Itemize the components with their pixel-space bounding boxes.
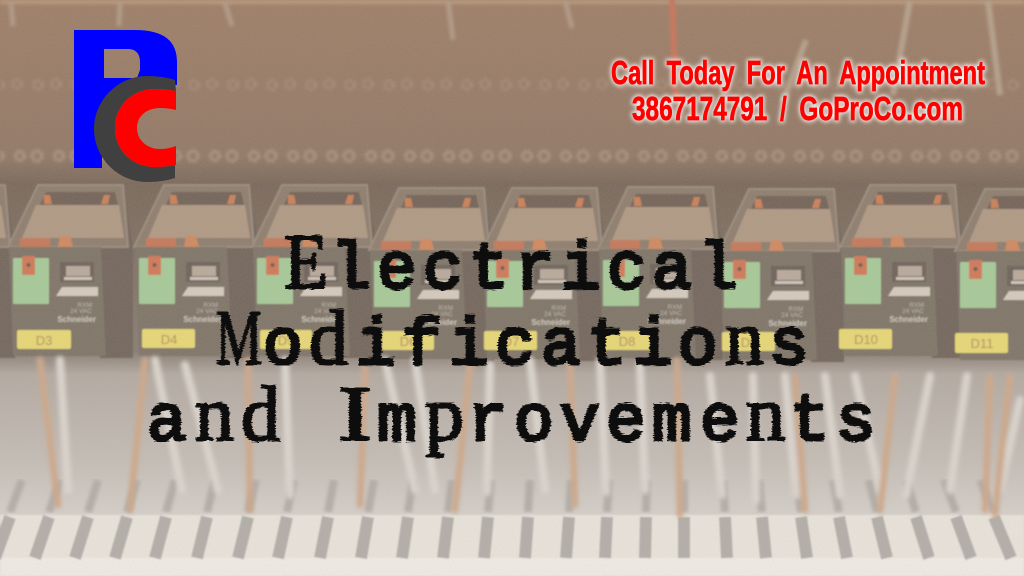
relay D2 partial [0, 185, 15, 358]
logo letter P [74, 30, 177, 168]
relay D7: Schneider [531, 318, 570, 327]
relay D5: Schneider [301, 315, 340, 324]
relay D3 [8, 185, 133, 358]
relay D3: RXM [78, 302, 92, 309]
title line 3: m [377, 385, 417, 460]
relay row D3 to D11 [0, 185, 1024, 362]
relay D4: 24 VAC [196, 308, 218, 315]
relay D4 [134, 185, 259, 358]
relay D9: Schneider [768, 319, 807, 328]
relay D9: 24 VAC [781, 312, 803, 319]
relay D4: D4 [161, 332, 177, 347]
relay D3: Schneider [57, 315, 96, 324]
logo letter C dark outline [94, 76, 176, 182]
relay D8: 24 VAC [660, 310, 682, 317]
call to action glow [611, 54, 985, 127]
title line 3: ts [790, 385, 876, 460]
relay D8: RXM [668, 304, 682, 311]
relay D5: RXM [322, 302, 336, 309]
title line 2: ificatio [356, 309, 718, 384]
title line 3: nd [195, 370, 280, 457]
logo: PC [74, 30, 177, 182]
relay D11: D11 [971, 336, 993, 351]
title line 3: n [746, 370, 785, 457]
relay D8: Schneider [647, 317, 686, 326]
relay D4: Schneider [183, 315, 222, 324]
relay D7: RXM [552, 305, 566, 312]
relay D7: 24 VAC [544, 311, 566, 318]
relay D8 [598, 187, 723, 360]
relay D10: 24 VAC [902, 308, 924, 315]
relay D5: 24 VAC [314, 308, 336, 315]
relay D11 [955, 189, 1024, 362]
title line 2: s [769, 309, 809, 384]
title [147, 218, 876, 460]
relay D5 [252, 185, 377, 358]
relay D8: D8 [619, 334, 635, 349]
relay D6: D6 [400, 334, 416, 349]
title line 2: n [725, 294, 764, 381]
top wires and terminal rows [0, 0, 1024, 168]
call to action text [611, 54, 985, 127]
title line 3: roveme [468, 385, 740, 460]
comb terminal strip [0, 515, 1024, 576]
relay D6: 24 VAC [431, 311, 453, 318]
terminal stubs [10, 480, 994, 512]
title line 2: M [216, 294, 262, 381]
relay D9: D9 [741, 335, 757, 350]
relay D9 [719, 189, 844, 362]
relay D7: D7 [503, 334, 519, 349]
relay D6: Schneider [418, 318, 457, 327]
relay D3: 24 VAC [70, 308, 92, 315]
relay D10: RXM [910, 302, 924, 309]
relay D10: D10 [854, 332, 878, 347]
title line 2: d [309, 294, 348, 381]
relay D10 [839, 185, 965, 358]
orange and white wires [40, 360, 1020, 515]
relay D3: D3 [36, 333, 52, 348]
relay D5: D5 [278, 333, 294, 348]
title line 3: a [147, 385, 187, 460]
title line 1: E [284, 218, 328, 305]
title line 3: I [338, 370, 372, 457]
relay D6: RXM [439, 305, 453, 312]
title line 3: p [425, 370, 464, 457]
relay D4: RXM [204, 302, 218, 309]
relay D6 [369, 188, 494, 361]
title line 1: lectrical [331, 233, 738, 308]
relay D9: RXM [789, 306, 803, 313]
title line 2: o [263, 309, 303, 384]
relay D7 [482, 188, 607, 361]
logo letter C red [115, 89, 176, 167]
relay D10: Schneider [889, 315, 928, 324]
